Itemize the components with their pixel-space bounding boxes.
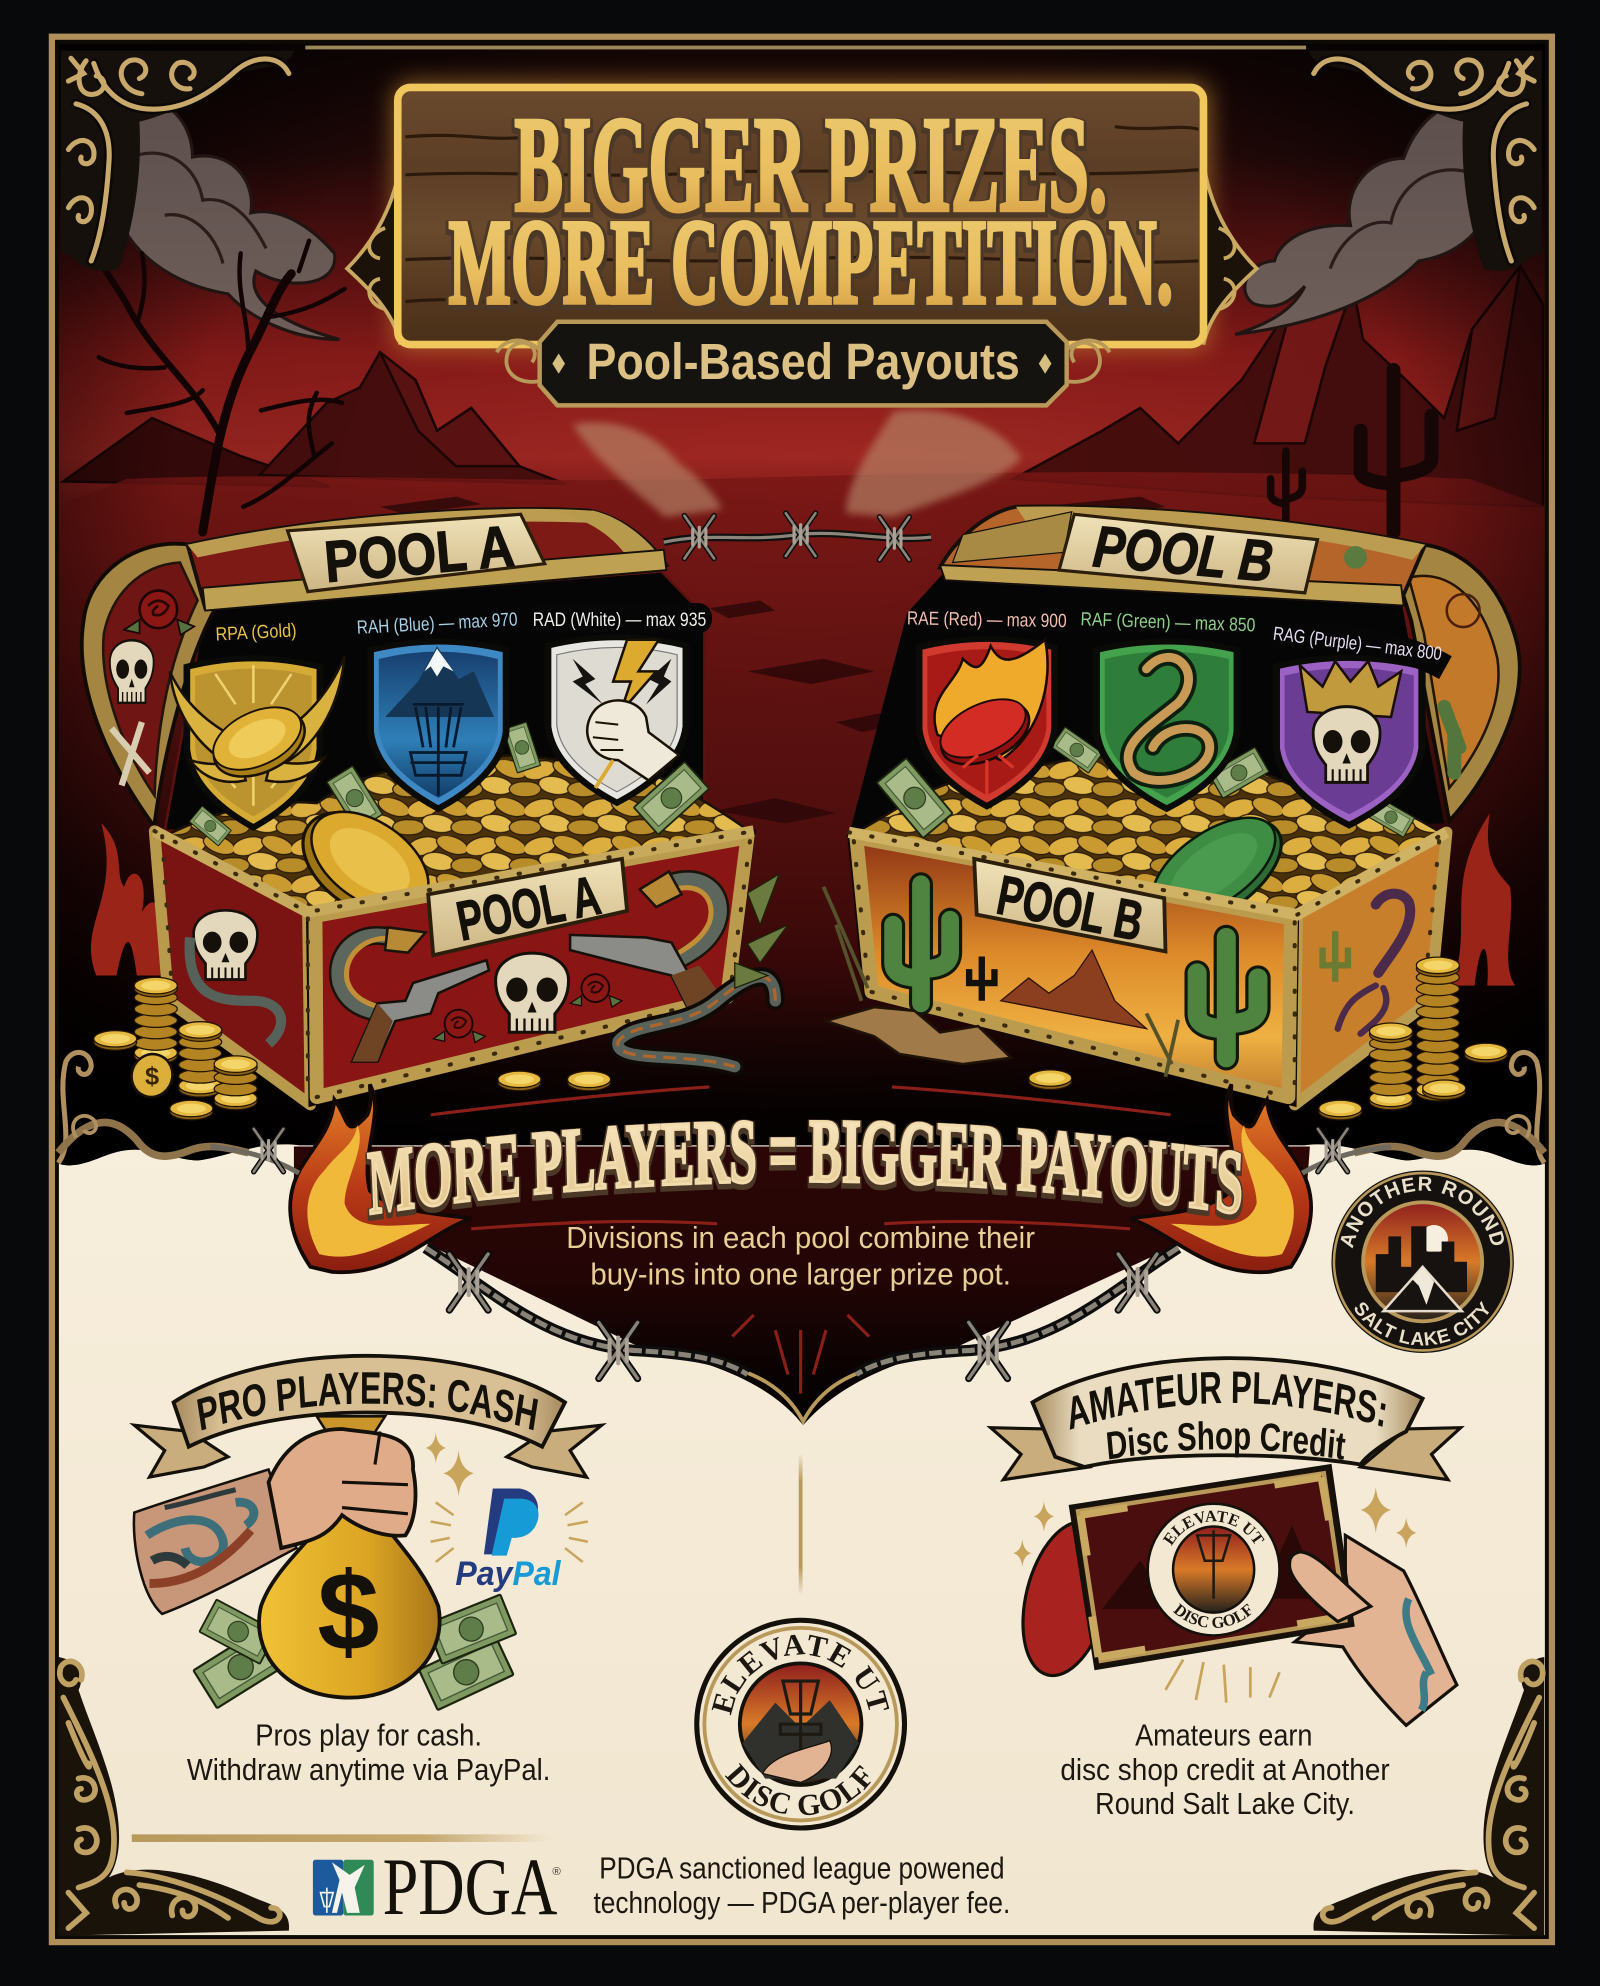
green badge snake bbox=[1128, 657, 1210, 780]
illustration: money bag bbox=[259, 1457, 440, 1698]
footer line 1: PDGA sanctioned league powened bbox=[599, 1852, 1005, 1886]
chest B lid label: POOL B bbox=[1091, 514, 1276, 595]
badge hand bbox=[763, 1741, 831, 1782]
illustration: bag tie bbox=[317, 1416, 385, 1452]
chest B front label: POOL B bbox=[992, 864, 1148, 953]
chest: Pool B bbox=[823, 506, 1520, 1105]
barbed wire between chests bbox=[664, 513, 931, 560]
ornament: left scene scroll bbox=[58, 1052, 248, 1163]
gold badge RPA bbox=[170, 656, 345, 827]
footer rule bbox=[132, 1834, 550, 1842]
badge top text: ANOTHER ROUND bbox=[1340, 1176, 1504, 1248]
title line 1: BIGGER PRIZES. bbox=[514, 88, 1107, 240]
chest B grass bbox=[823, 887, 1178, 1077]
chest B coin pile bbox=[849, 755, 1447, 917]
coin stacks left: $ bbox=[145, 1062, 159, 1090]
PDGA wordmark: PDGA bbox=[383, 1842, 557, 1932]
badge mountains bbox=[1383, 1267, 1462, 1311]
green badge RAF bbox=[1096, 641, 1237, 809]
white badge bolts bbox=[613, 640, 659, 712]
chest A cash bbox=[189, 722, 709, 846]
illustration: card: DISC GOLF bbox=[1172, 1603, 1252, 1628]
red badge disc bbox=[930, 687, 1039, 777]
chest A lid band bbox=[187, 509, 666, 608]
pro text line 2: Withdraw anytime via PayPal. bbox=[187, 1753, 550, 1787]
label RAF: RAF (Green) — max 850 bbox=[1080, 609, 1256, 636]
ornament: top left corner bbox=[61, 51, 294, 271]
amateur text line 1: Amateurs earn bbox=[1135, 1719, 1312, 1753]
scene sky and ground bbox=[57, 42, 1546, 1165]
title sign bbox=[347, 81, 1257, 350]
chest A rose right bbox=[570, 974, 622, 1007]
label RAH: RAH (Blue) — max 970 bbox=[356, 609, 518, 639]
registered mark: ® bbox=[552, 1866, 561, 1878]
chest B rocks bbox=[826, 1007, 1011, 1064]
badge bottom text: DISC GOLF bbox=[724, 1763, 871, 1816]
chest B green disc bbox=[1133, 797, 1299, 946]
chest A front snake left bbox=[338, 927, 426, 1013]
chest A roses bbox=[433, 1010, 485, 1043]
clouds right bbox=[1235, 99, 1508, 334]
red badge RAE bbox=[919, 639, 1055, 806]
badge top text: ELEVATE UT bbox=[712, 1634, 890, 1716]
chest B front face bbox=[849, 832, 1297, 1105]
amateur ribbon subheading: Disc Shop Credit bbox=[1106, 1421, 1346, 1460]
pro ribbon tails bbox=[134, 1425, 602, 1477]
red badge flame bbox=[934, 640, 1048, 760]
chest A front label: POOL A bbox=[452, 864, 605, 953]
sign side ornaments bbox=[347, 162, 1257, 345]
chest B lid end cap bbox=[1388, 544, 1520, 821]
ground bbox=[57, 472, 1546, 963]
chest A left face bbox=[155, 831, 310, 1105]
vertical divider bbox=[799, 1453, 803, 1595]
label RPA: RPA (Gold) bbox=[215, 620, 297, 646]
purple badge skull bbox=[1313, 707, 1380, 782]
shield inner rays bbox=[431, 1087, 1171, 1394]
smoke bbox=[573, 410, 1021, 517]
label RAD bbox=[527, 603, 712, 633]
illustration: tattooed arm bbox=[134, 1470, 296, 1614]
top rule bbox=[305, 46, 1306, 49]
purple badge RAG bbox=[1276, 658, 1422, 825]
badge bottom text: SALT LAKE CITY bbox=[1354, 1300, 1489, 1346]
scene vignette bbox=[57, 42, 1546, 1165]
amateur ribbon band bbox=[1032, 1358, 1423, 1467]
chest A ground snake bbox=[618, 977, 775, 1067]
centre banner shield bbox=[210, 1084, 1392, 1426]
illustration: red disc bbox=[1008, 1513, 1125, 1685]
cacti background bbox=[1271, 370, 1432, 532]
plaque body bbox=[540, 322, 1067, 405]
amateur ribbon heading: AMATEUR PLAYERS: bbox=[1070, 1372, 1386, 1430]
sparkles bbox=[426, 1433, 474, 1496]
chest B lid plate bbox=[1059, 514, 1317, 593]
chest B scene mesa bbox=[1001, 950, 1146, 1029]
footer text bbox=[594, 1852, 1010, 1920]
chest A rim bbox=[155, 831, 754, 912]
badge skyline bbox=[1376, 1226, 1467, 1292]
pro text line 1: Pros play for cash. bbox=[255, 1719, 482, 1753]
chest A gold disc bbox=[283, 789, 446, 940]
chest B cash bbox=[877, 727, 1415, 838]
wood grain bbox=[405, 127, 1198, 302]
footer: PDGA logo bbox=[313, 1842, 561, 1932]
tattoo bbox=[1406, 1599, 1432, 1710]
flames left bbox=[290, 1084, 471, 1272]
chest B scorpion bbox=[1338, 894, 1410, 1034]
ground cracks bbox=[380, 497, 1165, 823]
illustration: cash left bbox=[193, 1600, 288, 1708]
banner headline: MORE PLAYERS = BIGGER PAYOUTS bbox=[365, 1120, 1243, 1221]
dead tree bbox=[99, 241, 345, 532]
coin stacks left bbox=[94, 977, 611, 1120]
flames behind chest A bbox=[91, 823, 163, 975]
footer line 2: technology — PDGA per-player fee. bbox=[594, 1886, 1010, 1920]
pro ribbon band bbox=[174, 1356, 565, 1447]
plaque diamonds bbox=[552, 353, 1051, 374]
card landscape bbox=[1102, 1525, 1323, 1609]
purple badge crown bbox=[1300, 661, 1401, 717]
blue badge mountain bbox=[385, 646, 494, 717]
badge: Elevate UT Disc Golf bbox=[694, 1618, 908, 1830]
chest A right revolver bbox=[570, 935, 725, 1021]
mountains left bbox=[63, 352, 565, 486]
amateur text line 2: disc shop credit at Another bbox=[1060, 1753, 1390, 1787]
icon: PayPal bbox=[431, 1489, 588, 1593]
illustration: cash right bbox=[419, 1594, 516, 1710]
chest A left revolver bbox=[352, 960, 489, 1062]
barbed wire around shield bbox=[210, 1129, 1391, 1378]
blue badge RAH bbox=[371, 641, 506, 809]
light rays bbox=[1165, 1660, 1279, 1703]
chest A coin pile bbox=[165, 755, 747, 912]
panel: lower parchment bbox=[57, 1115, 1546, 1936]
chest B front plate bbox=[974, 859, 1165, 951]
ornament: right scene scroll bbox=[1354, 1052, 1544, 1163]
badge mountains bbox=[742, 1700, 859, 1779]
clouds left bbox=[111, 98, 340, 340]
ornament: bottom right corner bbox=[1313, 1657, 1544, 1936]
badge basket bbox=[780, 1680, 821, 1753]
chest A lid label: POOL A bbox=[322, 514, 517, 595]
plaque scrolls bbox=[497, 340, 1110, 382]
shield tip outline bbox=[709, 1362, 897, 1421]
chest B rim bbox=[849, 832, 1447, 915]
chest A front snake right bbox=[640, 872, 720, 963]
card badge bbox=[1148, 1504, 1279, 1635]
ornament: top right corner bbox=[1309, 51, 1542, 271]
icon: PayPal: PayPal bbox=[455, 1555, 562, 1593]
illustration: hand bbox=[1292, 1535, 1457, 1725]
sparkles bbox=[1013, 1487, 1416, 1567]
chest B left cactus bbox=[893, 884, 950, 1003]
chest B side cactus bbox=[1323, 931, 1348, 982]
chest B interior bbox=[849, 571, 1444, 836]
label RAE: RAE (Red) — max 900 bbox=[907, 608, 1067, 632]
banner subtext line 2: buy-ins into one larger prize pot. bbox=[590, 1258, 1011, 1292]
illustration: thumb bbox=[1289, 1552, 1371, 1622]
flames right bbox=[1130, 1084, 1311, 1272]
white badge RAD bbox=[548, 637, 686, 803]
chest A lid plate bbox=[288, 514, 545, 592]
chest A lid end cap bbox=[82, 544, 223, 823]
badge: Another Round Salt Lake City bbox=[1331, 1170, 1514, 1353]
subtitle plaque bbox=[497, 322, 1110, 405]
chest B right cactus bbox=[1197, 937, 1258, 1058]
label RAD: RAD (White) — max 935 bbox=[533, 610, 706, 631]
illustration: card bbox=[1068, 1464, 1355, 1670]
flames behind chest B bbox=[1452, 813, 1515, 986]
plaque text: Pool-Based Payouts bbox=[587, 333, 1020, 390]
gold badge disc bbox=[202, 694, 315, 790]
sign board bbox=[398, 87, 1203, 345]
mountains right bbox=[1013, 266, 1543, 507]
badge sun bbox=[1420, 1225, 1448, 1253]
chest B small cactus bbox=[969, 956, 994, 1001]
amateur text line 3: Round Salt Lake City. bbox=[1095, 1787, 1355, 1821]
illustration: money bag: $ bbox=[317, 1548, 379, 1673]
panel: pro players bbox=[129, 1354, 607, 1787]
chest A centre skull bbox=[496, 953, 569, 1032]
white badge fist bbox=[587, 700, 679, 780]
gold badge wings bbox=[170, 656, 345, 782]
coin stacks right bbox=[1029, 957, 1508, 1120]
panel: desert scene bbox=[57, 42, 1546, 1165]
chest A leaves bbox=[735, 874, 788, 988]
shield body bbox=[294, 1146, 1310, 1425]
illustration: card: ELEVATE UT bbox=[1162, 1510, 1265, 1546]
illustration: fist bbox=[269, 1429, 416, 1548]
chest A interior bbox=[165, 571, 704, 831]
label RAG: RAG (Purple) — max 800 bbox=[1272, 624, 1443, 665]
blue badge basket bbox=[410, 704, 466, 796]
ornament: bottom left corner bbox=[58, 1657, 289, 1936]
PDGA logo tile bbox=[313, 1860, 343, 1915]
chest A front face bbox=[308, 831, 754, 1105]
chest: Pool A bbox=[82, 509, 788, 1105]
pro ribbon heading: PRO PLAYERS: CASH bbox=[197, 1372, 538, 1430]
banner subtext line 1: Divisions in each pool combine their bbox=[566, 1221, 1035, 1255]
card corners bbox=[1081, 1477, 1343, 1657]
sign glow bbox=[393, 81, 1211, 350]
chest A front plate bbox=[428, 859, 627, 955]
chest A side skull bbox=[194, 910, 257, 980]
amateur ribbon tails bbox=[991, 1428, 1461, 1480]
chest B right face bbox=[1295, 832, 1447, 1105]
panel: amateur players bbox=[986, 1356, 1465, 1821]
chest A side snake bbox=[190, 937, 281, 1044]
chest B lid band bbox=[940, 506, 1425, 600]
